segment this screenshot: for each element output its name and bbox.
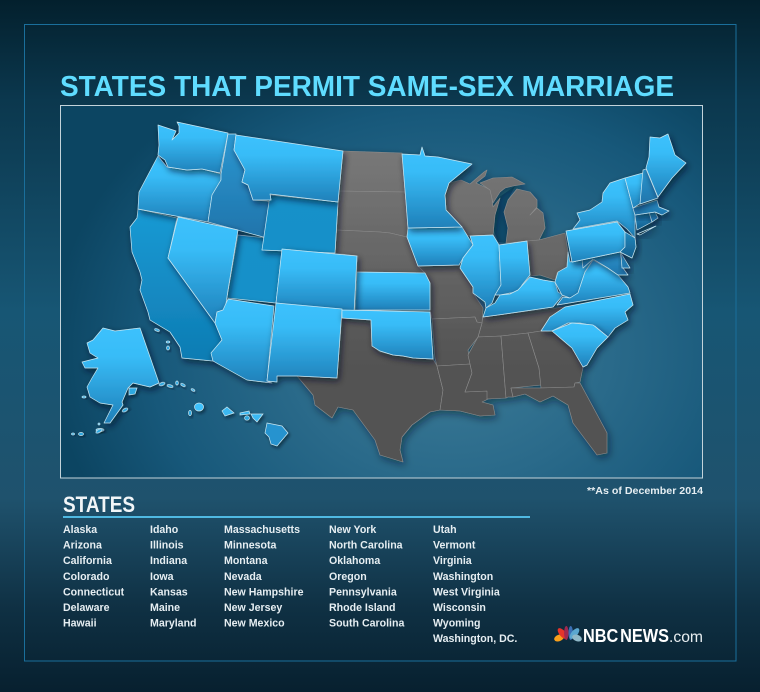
state: Louisiana [437,364,495,416]
state: Mississippi [465,336,506,399]
state list column 1: Hawaii [63,618,97,630]
states without same-sex marriage [297,151,607,462]
state list column 1: Colorado [63,571,110,583]
state list column 3: Minnesota [224,540,276,552]
state: Kansas [355,272,430,310]
state list column 5: West Virginia [433,586,500,598]
state: Florida [511,383,607,455]
state: Maryland [572,252,628,275]
state: Michigan lower peninsula [504,189,545,243]
islands of Alaska, California and Hawaii [72,328,288,446]
state: Michigan upper peninsula [480,177,525,203]
state list column 3: Nevada [224,571,262,583]
state: Connecticut [635,212,652,230]
list heading: STATES [63,492,135,517]
state list column 1 [63,524,125,630]
state list column 2: Indiana [150,555,187,567]
state: Illinois [460,235,501,308]
state: Indiana [495,241,530,295]
state list column 4: South Carolina [329,618,404,630]
islands: California channel [154,328,170,350]
state: New Hampshire [640,169,658,204]
state: Arizona [211,299,274,383]
state list column 3: New Jersey [224,602,282,614]
state: Alaska [82,328,159,423]
island: Kauai [194,403,204,411]
state: Kentucky [483,277,563,317]
state list column 1: Connecticut [63,586,125,598]
state: Colorado [276,249,357,313]
state list column 5: Wisconsin [433,602,486,614]
state list column 5: Utah [433,524,457,536]
state list column 5: Vermont [433,540,476,552]
islands: Aleutians [72,381,195,436]
state: Pennsylvania [566,222,625,262]
state list column 4 [329,524,404,630]
state: Oregon [138,156,221,222]
state list column 4: North Carolina [329,540,403,552]
map of the United States [72,122,686,462]
state list column 3: New Mexico [224,618,285,630]
state: Oklahoma [342,310,433,359]
state: Iowa [407,227,473,266]
state: Vermont [625,173,643,208]
state list column 2: Maryland [150,618,197,630]
logo: dot com: .com [669,629,703,646]
state list column 2: Iowa [150,571,174,583]
state: Wyoming [262,195,338,253]
state: Minnesota [402,147,472,228]
island: Molokai [240,411,250,415]
state list column 2: Idaho [150,524,179,536]
state: New York [573,178,635,238]
island: Oahu [222,407,234,416]
state: Missouri [418,265,483,323]
island: Niihau [188,410,192,416]
state: South Dakota [337,191,408,237]
state: Georgia [528,331,583,388]
footnote: **As of December 2014 [587,485,703,497]
state list column 4: Pennsylvania [329,586,397,598]
state: Ohio [527,233,568,280]
state: Delaware [621,253,630,268]
state list column 1: Arizona [63,540,102,552]
island: Big Island [265,423,288,446]
state: Massachusetts [633,200,669,215]
map panel [60,106,702,478]
state list column 5: Washington, DC. [433,633,517,645]
state: Montana [234,135,343,202]
state: Alabama [501,333,541,398]
state: Long Island [637,226,656,235]
state: Wisconsin [445,170,500,236]
state: Virginia [557,260,630,305]
state list column 2: Maine [150,602,180,614]
lake michigan [493,186,515,243]
state: New Jersey [620,232,636,258]
state list column 1: Alaska [63,524,97,536]
state: West Virginia [555,252,593,298]
title: STATES THAT PERMIT SAME-SEX MARRIAGE [60,71,674,103]
state list column 3 [224,524,304,630]
state: Utah [227,235,282,303]
state: Tennessee [478,307,565,337]
island: Maui [251,414,263,422]
state: Nevada [168,217,238,323]
state list column 4: New York [329,524,376,536]
state: Nebraska [335,230,425,273]
state list column 5: Wyoming [433,618,480,630]
state: Texas [297,318,443,462]
icon: NBC peacock [553,626,583,643]
state list column 2: Kansas [150,586,188,598]
island: Lanai [245,416,249,420]
list heading rule [63,516,530,518]
state list column 3: New Hampshire [224,586,304,598]
state: North Dakota [339,151,405,192]
state list column 4: Rhode Island [329,602,396,614]
state: Rhode Island [649,212,658,222]
state: New Mexico [267,303,342,382]
state list column 3: Montana [224,555,268,567]
state: Idaho [208,134,272,238]
state: North Carolina [541,294,633,337]
state: Washington [158,122,228,173]
state list column 1: California [63,555,112,567]
logo: NBC News wordmark: NBC NEWS [583,625,669,646]
state list column 4: Oregon [329,571,367,583]
state: Arkansas [432,317,482,366]
state list column 5: Virginia [433,555,472,567]
states with same-sex marriage [82,122,686,423]
island: Kodiak [129,388,137,395]
state: South Carolina [552,323,608,367]
state list column 2: Illinois [150,540,184,552]
state list column 5 [433,524,517,645]
state list column 5: Washington [433,571,493,583]
state: California [130,209,222,361]
state list column 1: Delaware [63,602,110,614]
state: Maine [646,134,686,197]
state list column 3: Massachusetts [224,524,300,536]
state list column 2 [150,524,197,630]
state list column 4: Oklahoma [329,555,380,567]
